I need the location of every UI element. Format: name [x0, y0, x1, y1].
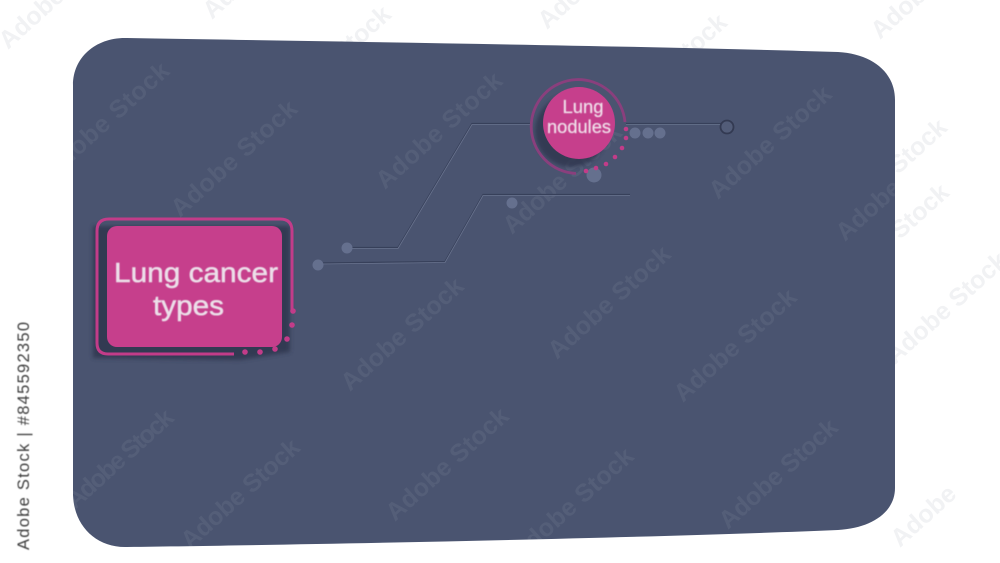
watermarks outside panel: Stock: [663, 8, 733, 74]
watermarks outside panel: Adobe: [885, 480, 962, 552]
watermarks on panel: Adobe Stock: [668, 283, 802, 407]
watermarks outside panel: Stock: [885, 178, 955, 244]
watermarks on panel: Adobe: [830, 174, 907, 246]
watermarks on panel: Adobe Stock: [60, 403, 179, 514]
watermark id: Adobe Stock #845592350: Adobe Stock | #845592350: [15, 322, 33, 550]
watermarks on panel: Adobe Stock: [335, 272, 469, 396]
node: Lung nodules: [531, 80, 628, 174]
heading: Lung cancer types: Lung cancer: [114, 257, 278, 288]
circle shadow: [535, 95, 607, 167]
watermarks outside panel: Stock: [883, 113, 953, 179]
magenta disc: [543, 87, 615, 159]
outer frame: [97, 219, 292, 354]
watermarks on panel: Adobe Stock: [713, 413, 844, 534]
watermarks on panel: Adobe Stock: [542, 240, 676, 364]
box shadow: [93, 226, 290, 360]
watermarks on panel: Adobe Stock: [497, 118, 628, 239]
watermarks on panel: Adobe Stock: [175, 433, 306, 554]
watermarks on panel: Adobe Stock: [703, 80, 837, 204]
magenta box: [107, 226, 282, 347]
watermarks on panel: Adobe Stock: [380, 402, 514, 526]
connector nodes: [312, 128, 666, 270]
panel: dark slate background card: [73, 38, 895, 547]
watermarks on panel: Adobe Stock: [165, 95, 303, 222]
heading: Lung nodules: Lung: [562, 96, 604, 117]
beaded dots: [242, 308, 296, 355]
heading: Lung cancer types: [114, 257, 278, 321]
heading: Lung cancer types: types: [153, 290, 224, 321]
icon: ring end node: [720, 120, 734, 134]
watermarks on panel: Adobe Stock: [370, 67, 508, 194]
watermarks on panel: Adobe Stock: [37, 57, 175, 184]
heading: Lung nodules: nodules: [547, 116, 611, 137]
watermarks on panel: Adobe Stock: [505, 442, 639, 563]
node: Lung cancer types: [93, 219, 296, 360]
heading: Lung nodules: [547, 96, 611, 137]
outer ring: [531, 80, 625, 174]
watermarks outside panel: Stock: [327, 0, 397, 66]
watermarks on panel: [37, 57, 907, 563]
connector lines: [319, 124, 722, 264]
ring beads: [584, 127, 628, 173]
